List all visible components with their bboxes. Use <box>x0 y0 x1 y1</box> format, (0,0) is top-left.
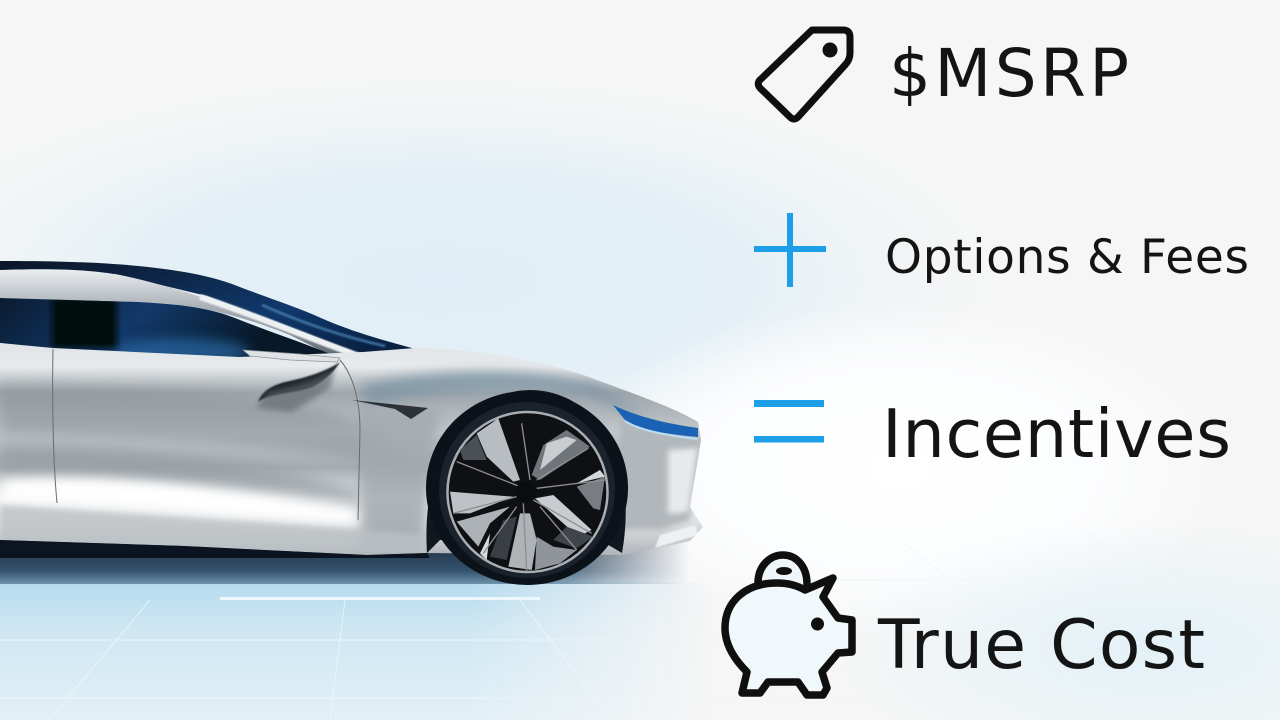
mirror shadow blur <box>256 368 335 412</box>
hub <box>516 485 520 497</box>
coin mark <box>776 567 792 575</box>
coin <box>758 555 807 584</box>
label: options and fees: Options & Fees <box>885 230 1249 285</box>
headlight lower trim <box>625 421 697 439</box>
car <box>0 261 760 585</box>
spokes <box>450 418 605 572</box>
car shadow <box>0 540 760 584</box>
heading: MSRP: $MSRP <box>889 35 1129 112</box>
roof dark band <box>0 261 415 355</box>
roof band highlight <box>262 305 385 346</box>
floor with perspective grid <box>0 540 932 720</box>
label: incentives: Incentives <box>882 395 1231 473</box>
a-pillar highlight <box>200 297 362 357</box>
car body <box>0 340 720 560</box>
side window <box>0 298 329 357</box>
fender vent <box>352 400 428 419</box>
label: true cost: True Cost <box>877 606 1205 685</box>
rim <box>448 412 608 572</box>
icon: equals <box>754 400 824 442</box>
dark window pillar <box>52 298 117 348</box>
headlight <box>613 405 698 437</box>
underbody <box>0 540 430 558</box>
roof rail <box>0 269 344 354</box>
window reflection <box>110 338 250 366</box>
icon: price tag <box>758 30 850 119</box>
piggy body <box>725 578 852 695</box>
tire <box>426 391 628 585</box>
icon: plus <box>754 213 826 287</box>
door lines <box>53 349 360 520</box>
eye <box>811 618 824 630</box>
icon: piggy bank <box>725 555 852 695</box>
side mirror <box>243 350 340 362</box>
wheel <box>426 390 628 585</box>
mirror shadow <box>258 362 340 402</box>
wheel arch <box>426 390 626 553</box>
